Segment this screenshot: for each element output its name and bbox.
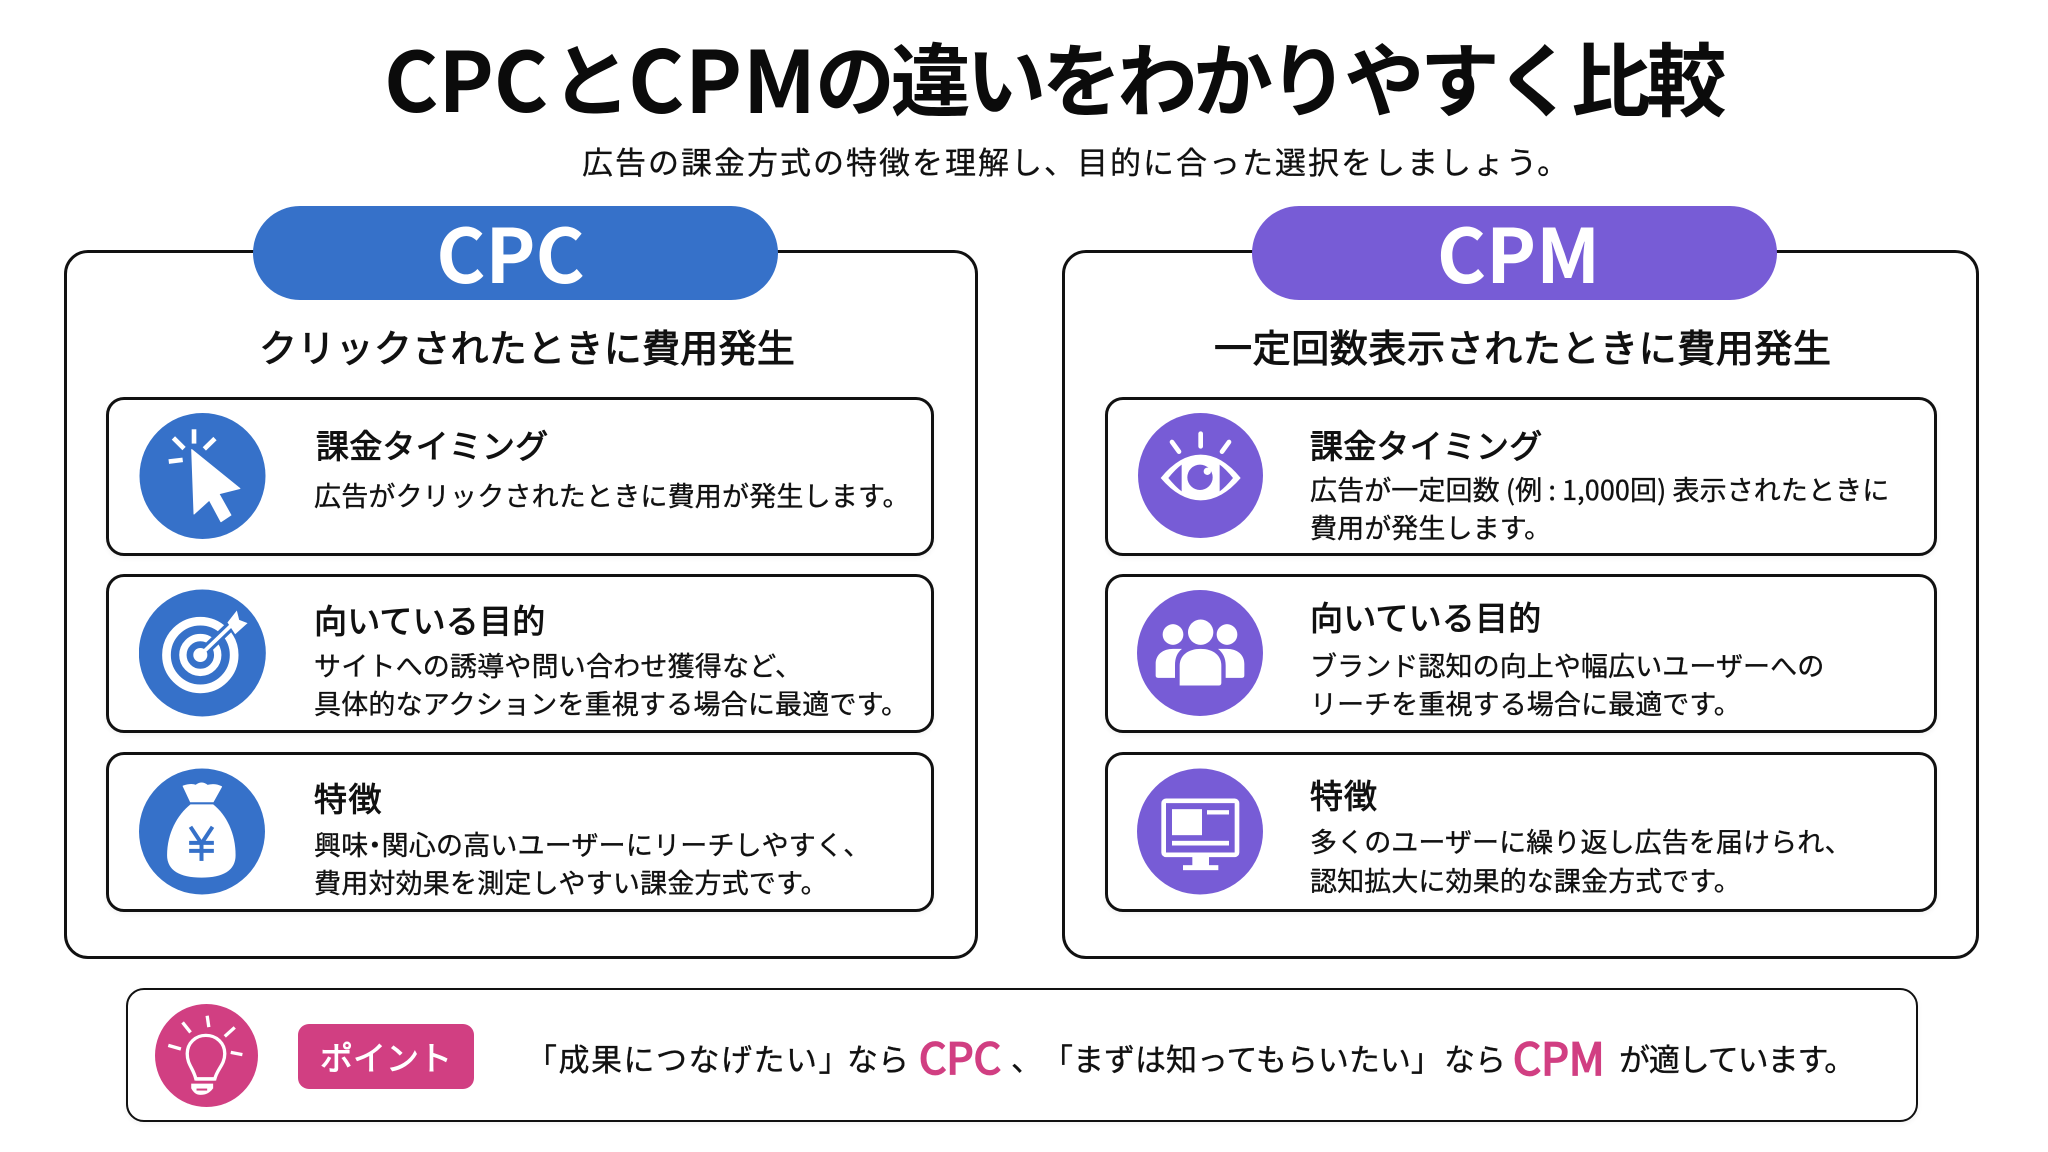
- callout text: 「まずは知ってもらいたい」: [1042, 1035, 1442, 1080]
- panel: CPC: [64, 250, 978, 959]
- body: suitable purpose: リーチを重視する場合に最適です。: [1310, 682, 1741, 722]
- body: features: 多くのユーザーに繰り返し広告を届けられ、: [1310, 821, 1852, 860]
- icon: light bulb: [155, 1004, 258, 1107]
- CPC badge: CPC: [436, 196, 585, 305]
- CPC row: billing timing: [106, 397, 934, 556]
- body: features: 認知拡大に効果的な課金方式です。: [1310, 860, 1741, 898]
- icon: monitor: [1137, 768, 1263, 894]
- callout text: 「成果につなげたい」: [526, 1035, 851, 1080]
- heading: suitable purpose: 向いている目的: [1310, 592, 1541, 640]
- title: の違いをわかりやすく比較: [815, 18, 1722, 134]
- body: suitable purpose: [1310, 645, 1824, 722]
- title: CPM: [628, 13, 817, 138]
- heading: billing timing: 課金タイミング: [316, 420, 548, 468]
- heading: billing timing: 課金タイミング: [1310, 420, 1542, 468]
- body: suitable purpose: 具体的なアクションを重視する場合に最適です。: [314, 682, 908, 722]
- heading: features: 特徴: [1310, 770, 1378, 818]
- subtitle: 広告の課金方式の特徴を理解し、目的に合った選択をしましょう。: [582, 138, 1570, 183]
- CPM badge: [1252, 206, 1777, 300]
- callout text: [526, 1024, 1854, 1088]
- callout text: CPC: [919, 1025, 1001, 1087]
- CPM panel heading: 一定回数表示されたときに費用発生: [1214, 318, 1832, 373]
- icon: money bag: [139, 768, 265, 894]
- icon: target: [139, 590, 266, 716]
- CPC badge: [253, 206, 778, 300]
- icon: eye: [1138, 413, 1263, 538]
- body: billing timing: [1310, 469, 1889, 546]
- body: billing timing: 広告がクリックされたときに費用が発生します。: [314, 475, 910, 514]
- body: billing timing: 費用が発生します。: [1310, 506, 1551, 546]
- CPM row: features: [1105, 752, 1937, 912]
- CPM row: billing timing: [1105, 397, 1937, 556]
- heading: features: 特徴: [314, 773, 383, 821]
- body: features: [1310, 821, 1852, 898]
- point badge: ポイント: [320, 1032, 452, 1080]
- body: suitable purpose: ブランド認知の向上や幅広いユーザーへの: [1310, 645, 1824, 684]
- callout text: なら: [847, 1035, 909, 1080]
- title: [384, 13, 1726, 138]
- CPM row: suitable purpose: [1105, 574, 1937, 733]
- title: CPC: [384, 16, 548, 136]
- body: suitable purpose: サイトへの誘導や問い合わせ獲得など、: [314, 645, 802, 684]
- CPM badge: CPM: [1437, 196, 1600, 305]
- body: suitable purpose: [314, 645, 908, 722]
- heading: suitable purpose: 向いている目的: [314, 595, 545, 643]
- point badge: [298, 1024, 474, 1089]
- callout text: が適しています。: [1619, 1035, 1854, 1080]
- title: と: [551, 18, 631, 134]
- CPC panel heading: クリックされたときに費用発生: [259, 318, 795, 373]
- body: features: 費用対効果を測定しやすい課金方式です。: [314, 862, 828, 900]
- callout text: CPM: [1513, 1024, 1605, 1088]
- icon: click cursor: [140, 413, 266, 539]
- CPC row: features: [106, 752, 934, 912]
- body: features: [314, 824, 870, 900]
- callout text: なら: [1444, 1035, 1506, 1080]
- callout text: 、: [1011, 1035, 1042, 1080]
- icon: people: [1137, 590, 1263, 716]
- panel: CPM: [1062, 250, 1979, 959]
- CPC row: suitable purpose: [106, 574, 934, 733]
- body: billing timing: 広告が一定回数 (例 : 1,000回) 表示されたときに: [1310, 469, 1889, 508]
- callout: point: [126, 988, 1918, 1122]
- body: features: 興味・関心の高いユーザーにリーチしやすく、: [314, 824, 870, 863]
